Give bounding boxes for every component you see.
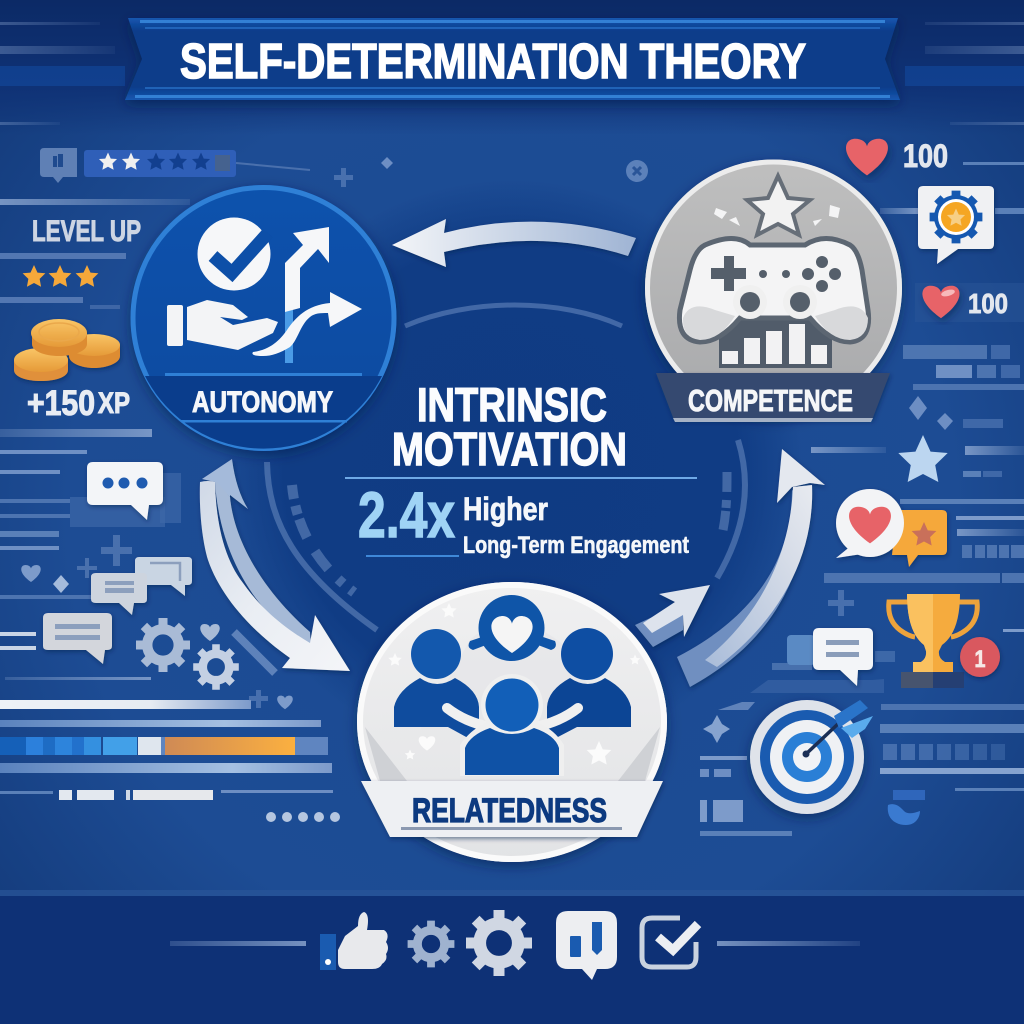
arrow: small rising arrow [635, 585, 710, 647]
icon: check circle [198, 218, 270, 290]
icon: heart bubble [469, 595, 556, 661]
icon: trophy: 1 [974, 646, 986, 673]
arrow: autonomy to relatedness [200, 459, 350, 671]
decorative side bars: right [700, 162, 1024, 836]
icon: trophy [889, 594, 1000, 688]
centre statistic: Long-Term Engagement [463, 532, 689, 559]
panel: autonomy [130, 185, 396, 451]
icon: upward arrow [285, 227, 329, 363]
panel: relatedness [357, 582, 667, 862]
bar chart [722, 324, 827, 364]
icon: game controller [679, 238, 869, 368]
centre heading: MOTIVATION [392, 423, 627, 475]
icon: chat bubble lines [813, 628, 873, 686]
centre statistic [358, 479, 689, 559]
icon: heart 100 top: 100 [903, 138, 948, 174]
icon: three gold stars [23, 265, 98, 287]
icon: thumbs up [320, 912, 388, 970]
label: autonomy: AUTONOMY [192, 386, 333, 419]
dots row [266, 812, 340, 822]
arrow: relatedness to competence [677, 449, 825, 687]
level up label: LEVEL UP [32, 215, 141, 248]
icon: centre person [460, 674, 564, 776]
icon: winding arrow [252, 292, 362, 356]
icon: heart 100 top [846, 138, 948, 175]
label: relatedness: RELATEDNESS [412, 792, 607, 830]
decorative side bars: left [0, 199, 333, 800]
panel: competence [645, 160, 902, 422]
label: competence: COMPETENCE [688, 383, 853, 418]
banner: competence [656, 373, 890, 422]
centre heading [345, 378, 697, 479]
icon: large gear [466, 910, 532, 976]
segmented progress bar [0, 737, 328, 755]
bottom icon row [170, 910, 860, 980]
xp label: +150 [27, 384, 95, 423]
icon: heart and star bubbles [836, 489, 947, 567]
icon: heart 100 lower: 100 [968, 288, 1008, 319]
icon: small gear [408, 921, 454, 967]
icon: stacked chat bubbles [43, 557, 192, 664]
icon: star [747, 176, 810, 235]
rating bar [40, 148, 310, 183]
arrow: competence to autonomy [392, 219, 636, 267]
title text: SELF-DETERMINATION THEORY [180, 35, 806, 89]
icon: left person [394, 629, 479, 738]
centre heading: INTRINSIC [417, 378, 607, 431]
centre statistic: 2.4x [358, 479, 455, 551]
title banner [125, 18, 900, 100]
icon: target with dart [750, 700, 873, 814]
small decorative shapes [21, 157, 953, 825]
icon: gold coins [14, 319, 120, 381]
icon: right person [547, 628, 631, 738]
centre statistic: Higher [463, 491, 548, 527]
icon: star [898, 435, 948, 482]
icon: chart bubble [556, 911, 617, 980]
icon: chat bubble dots [70, 462, 181, 527]
icon: award bubble [918, 186, 994, 264]
icon: hand [167, 300, 278, 350]
icon: heart 100 lower [922, 286, 1008, 319]
icon: gears left [136, 618, 239, 690]
icon: checkbox [642, 918, 698, 967]
xp label: XP [98, 387, 130, 420]
banner: relatedness [361, 781, 663, 837]
